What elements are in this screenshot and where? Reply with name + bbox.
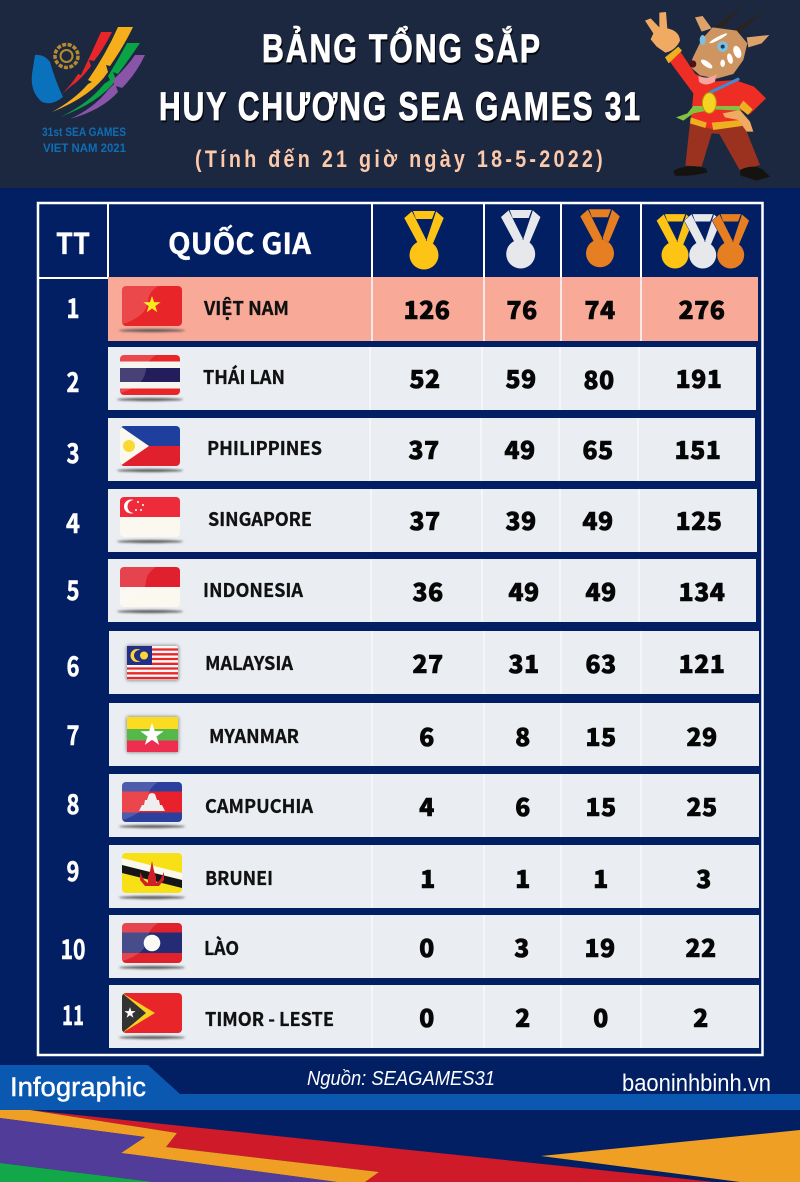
name: VIỆT NAM (203, 294, 289, 321)
medal counts: 27 (412, 645, 444, 681)
row 11: Timor-Leste (62, 985, 759, 1048)
medal counts: 39 (505, 502, 537, 538)
medal counts: 1 (515, 860, 531, 896)
bottom decorative bolts (0, 1110, 800, 1182)
row 4: Singapore (66, 489, 757, 552)
row 7: Myanmar (66, 703, 759, 766)
medal counts: 63 (585, 645, 617, 681)
logo: SEA Games 31: 31st SEA GAMES (42, 125, 126, 139)
medal counts: 31 (508, 645, 540, 681)
flag: Brunei (119, 853, 185, 899)
flag: Thailand (117, 355, 183, 401)
header: QUỐC GIA: QUỐC GIA (168, 221, 311, 263)
medal counts: 49 (585, 573, 617, 609)
title (159, 24, 642, 129)
rank 4: 4 (66, 502, 80, 541)
medal counts: 76 (506, 291, 538, 327)
rank 6: 6 (66, 645, 80, 684)
medal counts: 151 (675, 431, 721, 467)
medal counts: 6 (419, 718, 435, 754)
table header (56, 203, 749, 278)
row 9: Brunei (66, 845, 759, 908)
flag: Laos (119, 923, 185, 969)
flag: Indonesia (117, 567, 183, 613)
rank 3: 3 (66, 432, 80, 471)
medal counts: 1 (593, 860, 609, 896)
flag: Singapore (117, 497, 183, 543)
rank 10: 10 (60, 928, 86, 967)
flag: Myanmar (126, 716, 179, 753)
logo: SEA Games 31: VIET NAM 2021 (43, 141, 126, 155)
medal counts (419, 718, 718, 754)
icon: gold medal (404, 211, 444, 270)
name: CAMPUCHIA (205, 792, 314, 819)
tab label: Infographic (10, 1072, 146, 1102)
medal counts: 25 (686, 788, 718, 824)
table outer frame (38, 203, 762, 1055)
mascot (645, 5, 770, 181)
icon: bronze medal (580, 209, 620, 267)
flag: Philippines (117, 426, 183, 472)
medal counts: 134 (679, 573, 725, 609)
medal counts: 19 (584, 929, 616, 965)
medal counts: 22 (685, 929, 717, 965)
medal counts: 0 (419, 999, 435, 1035)
medal counts (412, 645, 725, 681)
title: BẢNG TỔNG SẮP (262, 24, 542, 71)
medal counts: 59 (505, 360, 537, 396)
medal counts: 126 (404, 291, 450, 327)
medal counts: 8 (515, 718, 531, 754)
footer band with Infographic tab (0, 1065, 800, 1110)
name: MYANMAR (209, 722, 299, 749)
rank 2: 2 (66, 361, 80, 400)
medal counts: 6 (515, 788, 531, 824)
subtitle: (Tính đến 21 giờ ngày 18-5-2022) (195, 146, 606, 173)
flag: Vietnam (119, 286, 185, 332)
medal counts (409, 502, 722, 538)
rank 8: 8 (66, 783, 80, 822)
medal counts: 121 (679, 645, 725, 681)
medal counts: 276 (679, 291, 725, 327)
medal counts: 15 (585, 788, 617, 824)
row 8: Campuchia (66, 774, 759, 837)
source note: Nguồn: SEAGAMES31 (307, 1068, 495, 1090)
medal counts: 49 (582, 502, 614, 538)
medal counts (419, 788, 718, 824)
row 6: Malaysia (66, 631, 759, 694)
medal counts (419, 929, 717, 965)
medal counts: 0 (593, 999, 609, 1035)
row 3: Philippines (66, 418, 755, 481)
name: LÀO (204, 934, 239, 961)
flag: Malaysia (126, 645, 179, 681)
rank 5: 5 (66, 569, 80, 608)
rank 9: 9 (66, 850, 80, 889)
row 5: Indonesia (66, 559, 756, 622)
medal counts: 15 (585, 718, 617, 754)
medal counts (409, 360, 722, 397)
medal counts: 37 (408, 431, 440, 467)
row 1: Việt Nam (66, 277, 758, 341)
medal counts: 49 (504, 431, 536, 467)
rank 11: 11 (62, 994, 84, 1033)
medal counts (404, 291, 725, 327)
medal counts: 37 (409, 502, 441, 538)
medal counts: 125 (676, 502, 722, 538)
medal counts: 3 (696, 860, 712, 896)
medal counts: 4 (419, 788, 435, 824)
medal counts: 2 (515, 999, 531, 1035)
medal counts (419, 999, 709, 1035)
row 10: Lào (60, 915, 759, 978)
name: MALAYSIA (205, 649, 294, 676)
medal counts: 1 (420, 860, 436, 896)
header banner (0, 0, 800, 188)
rank 1: 1 (66, 287, 80, 326)
medal counts: 29 (686, 718, 718, 754)
name: PHILIPPINES (207, 434, 322, 461)
medal counts: 191 (676, 360, 722, 396)
medal counts: 74 (584, 291, 616, 327)
row 2: Thái Lan (66, 347, 756, 410)
header: TT: TT (56, 221, 90, 263)
title: HUY CHƯƠNG SEA GAMES 31 (159, 85, 642, 129)
medal counts (420, 860, 712, 896)
medal counts: 80 (583, 361, 615, 397)
medal counts: 36 (412, 573, 444, 609)
medal counts (412, 573, 725, 609)
name: THÁI LAN (203, 363, 285, 390)
logo: SEA Games 31 (32, 27, 145, 155)
flag: Cambodia (119, 782, 185, 828)
medal counts: 3 (514, 929, 530, 965)
rank 7: 7 (66, 714, 80, 753)
medal counts (408, 431, 721, 467)
name: SINGAPORE (208, 505, 312, 532)
medal counts: 0 (419, 929, 435, 965)
name: BRUNEI (205, 864, 273, 891)
medal counts: 52 (409, 360, 441, 396)
flag: Timor-Leste (119, 993, 185, 1039)
name: TIMOR - LESTE (205, 1005, 334, 1032)
site name: baoninhbinh.vn (622, 1070, 771, 1097)
medal counts: 65 (582, 431, 614, 467)
icon: silver medal (501, 210, 541, 268)
medal counts: 2 (693, 999, 709, 1035)
icon: all medals total (656, 214, 749, 268)
name: INDONESIA (203, 576, 304, 603)
medal counts: 49 (508, 573, 540, 609)
